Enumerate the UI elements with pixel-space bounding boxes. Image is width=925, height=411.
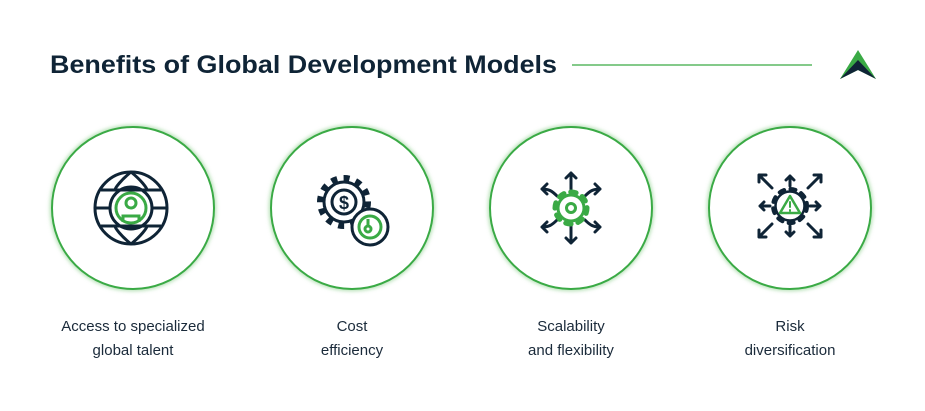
panel: scalability: [490, 127, 652, 359]
panel: cost: Cost: [337, 318, 368, 335]
title: Benefits of Global Development Models: [50, 51, 557, 79]
icon: gear warning arrows: [759, 175, 821, 237]
label: Access to specialized: [61, 318, 205, 335]
panel: talent: [52, 127, 214, 359]
panel: cost: efficiency: [321, 342, 384, 359]
icon: globe person: [95, 172, 167, 244]
icon: gear dollar: $: [339, 193, 349, 213]
panel: risk: diversification: [745, 342, 835, 359]
panel: scalability: Scalability: [537, 318, 605, 335]
icon: gear arrows: [542, 173, 600, 243]
panel: scalability: and flexibility: [528, 342, 614, 359]
icon: gear dollar: [320, 178, 388, 245]
panel: risk: Risk: [775, 318, 805, 335]
panel: talent: global talent: [93, 342, 174, 359]
panel: risk: [709, 127, 871, 359]
panel: cost: [271, 127, 433, 359]
icon: logo: [840, 50, 876, 79]
